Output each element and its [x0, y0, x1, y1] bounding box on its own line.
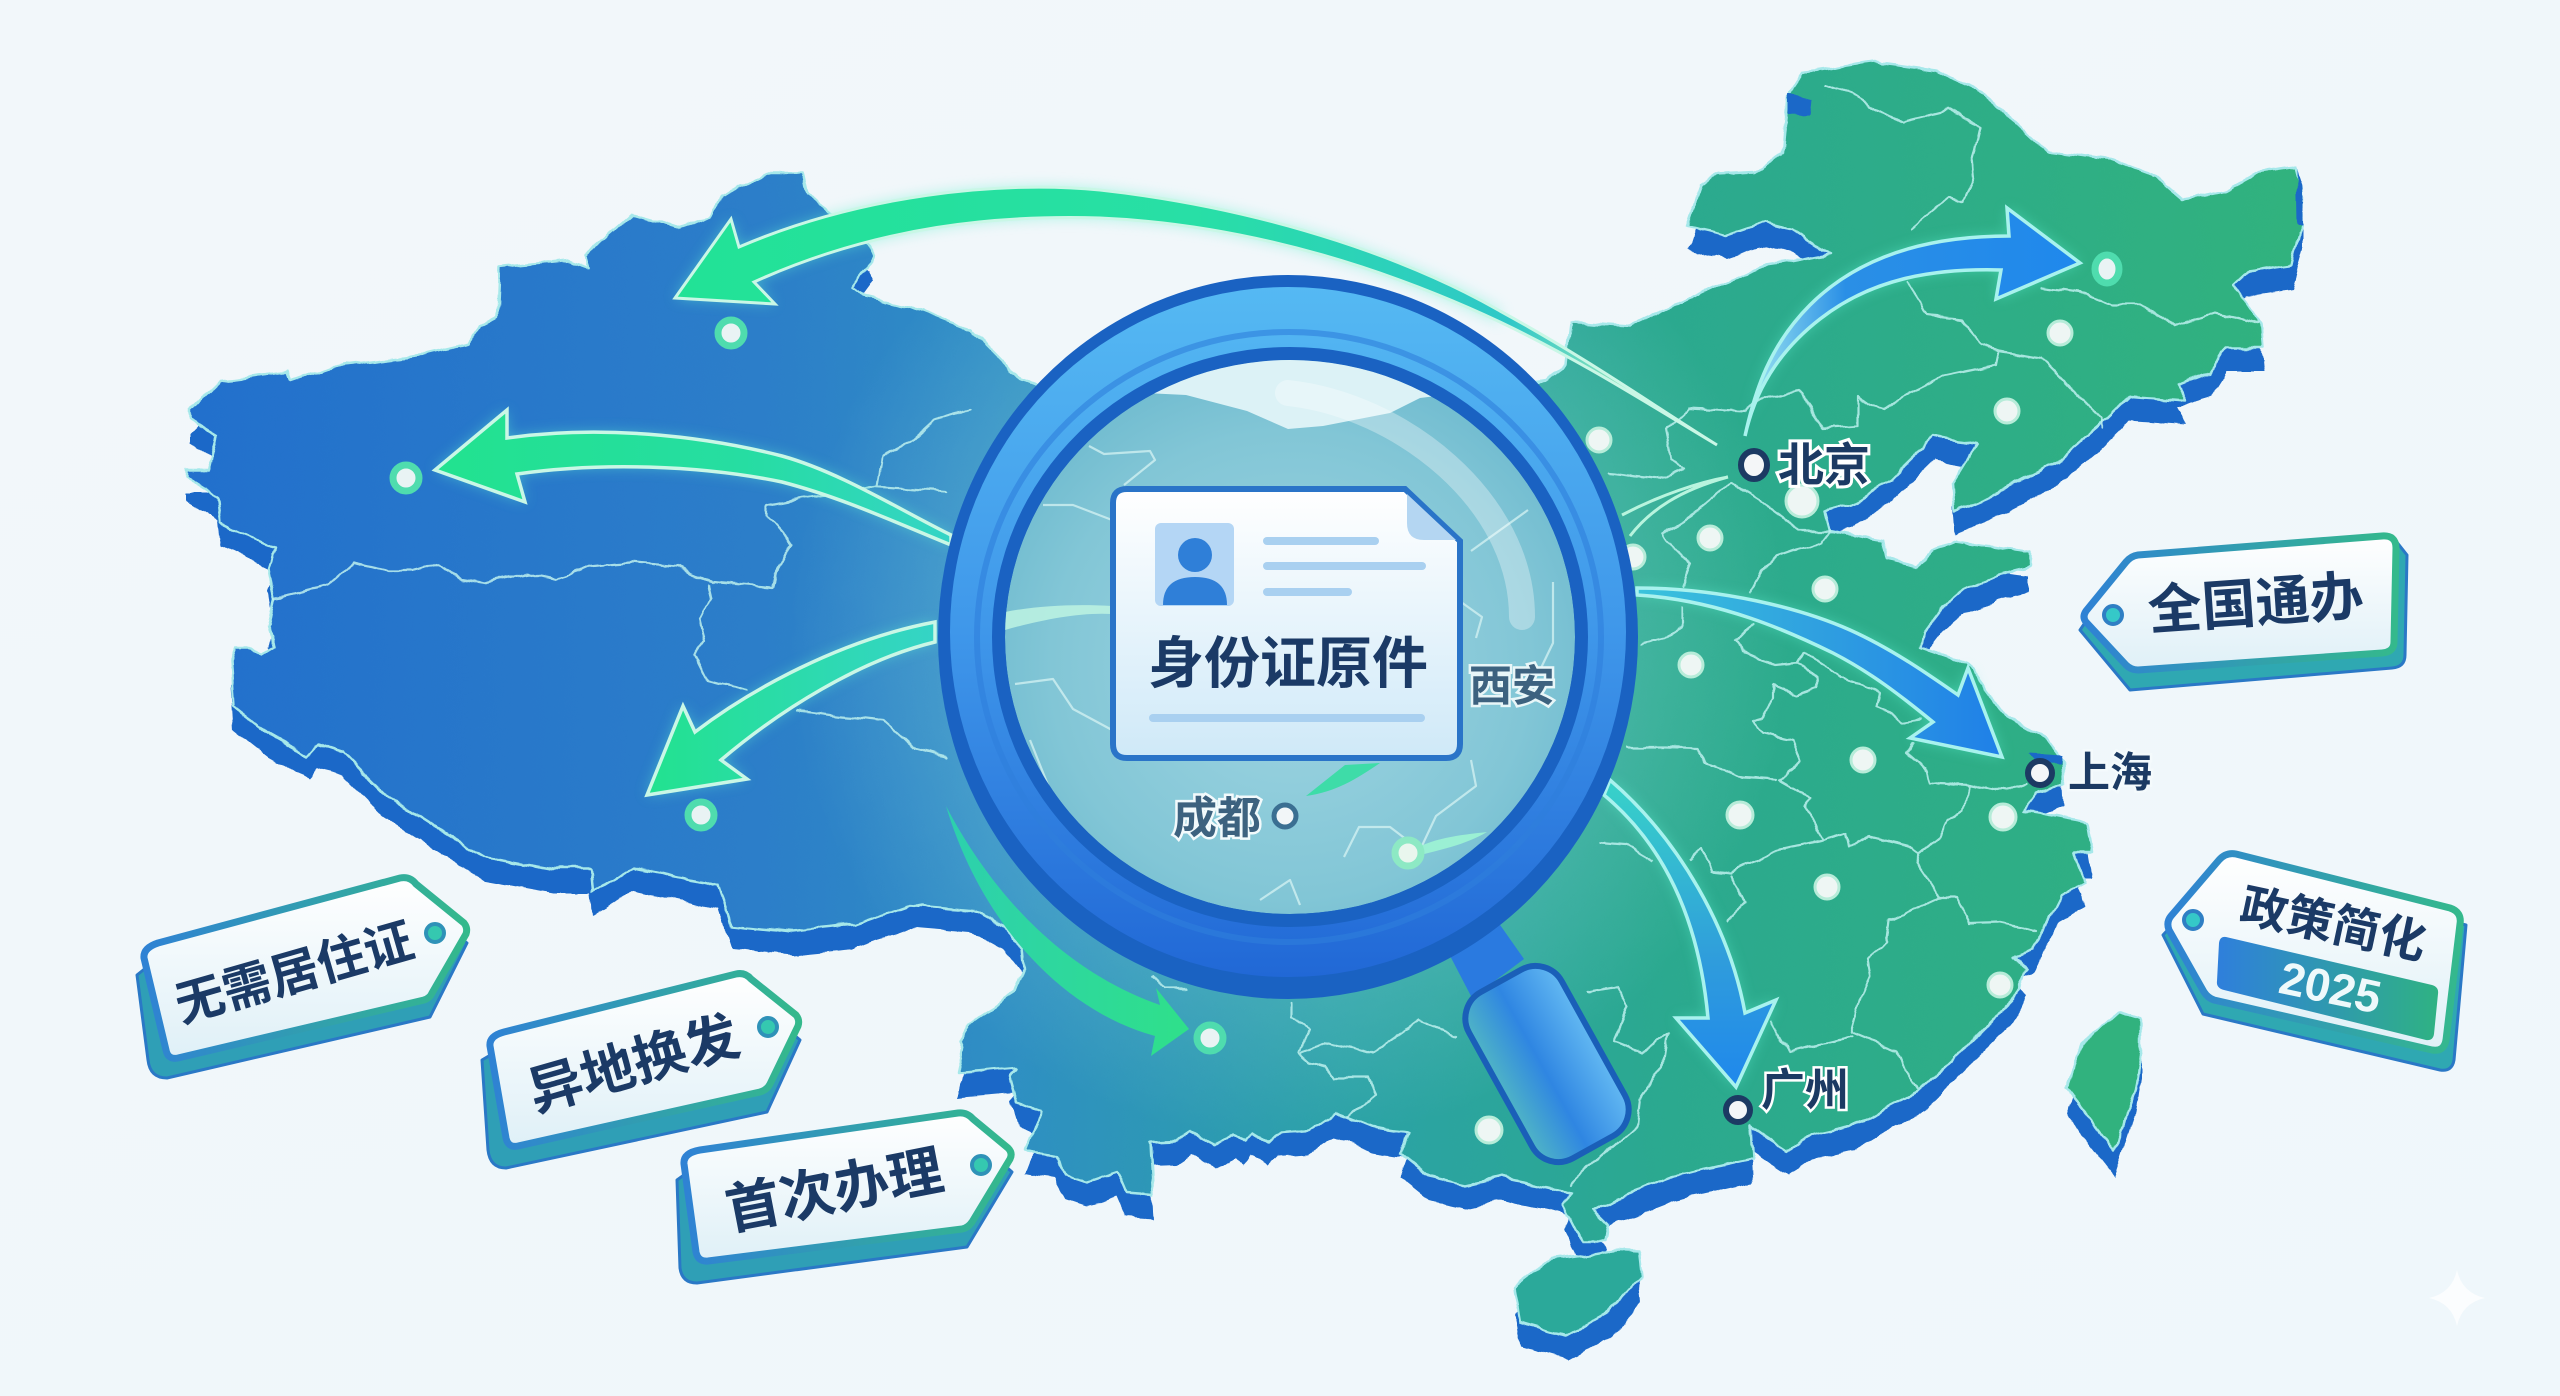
city label: Xi'an: 西安 [1469, 663, 1555, 711]
tag: off-site renewal: 异地换发 [522, 1006, 746, 1123]
white province nodes [1476, 321, 2072, 1143]
tag: nationwide service: 全国通办 [2146, 567, 2366, 642]
year badge: 2025 [2275, 951, 2386, 1023]
island: Hainan [1515, 1250, 1642, 1335]
ID card [1113, 489, 1460, 758]
arrow glow [435, 187, 2080, 1087]
city marker: Guangzhou [1726, 1066, 1849, 1122]
lens halo [844, 323, 1736, 1086]
city marker: Guangzhou: 广州 [1761, 1066, 1849, 1115]
tag: policy simplified 2025 [2163, 854, 2466, 1070]
card fold [1407, 494, 1456, 540]
tag: no residence permit: 无需居住证 [169, 914, 420, 1033]
city dot: Chengdu [1274, 805, 1296, 827]
icon: sparkle watermark [2429, 1270, 2485, 1326]
city label: Chengdu: 成都 [1173, 794, 1261, 843]
city marker: Shanghai: 上海 [2068, 749, 2152, 796]
lens borders [1015, 446, 1553, 905]
tag: no residence permit [137, 878, 467, 1078]
tag: first application [677, 1113, 1012, 1283]
green arrow: to Tibet [647, 622, 935, 795]
island: Taiwan [2066, 1011, 2141, 1151]
mainland [185, 61, 2302, 1240]
card title: 身份证原件 [1148, 632, 1428, 695]
green arrow: to Xinjiang west [435, 410, 951, 545]
lens sky [1154, 360, 1432, 429]
tag: nationwide service [2080, 536, 2407, 690]
tag: first application: 首次办理 [720, 1139, 948, 1242]
blue arrow: to Shanghai [1637, 588, 2002, 757]
handle grip [1455, 955, 1639, 1173]
outer ring [938, 275, 1638, 999]
portrait [1155, 523, 1234, 606]
lens highlight [1288, 393, 1522, 617]
city marker: Beijing: 北京 [1778, 439, 1870, 491]
lens arrow traces [1005, 605, 1112, 630]
card body [1113, 489, 1460, 758]
lens node [1395, 840, 1421, 866]
magnifying glass [938, 275, 1639, 1173]
city marker: Shanghai [2028, 749, 2152, 796]
green arrow: to Xinjiang north [675, 187, 1717, 445]
year badge [2217, 937, 2438, 1040]
info lines [1153, 541, 1422, 718]
map of China [185, 61, 2303, 1361]
lens [1005, 360, 1575, 914]
green arrow: to southwest [946, 806, 1189, 1056]
tag: off-site renewal [482, 974, 800, 1168]
blue coastal patches [1787, 94, 2303, 764]
blue arrow: to Heilongjiang [1745, 208, 2080, 436]
handle neck [1446, 922, 1524, 998]
green-ringed destination nodes [393, 255, 2119, 1051]
tag: policy simplified 2025: 政策简化 [2236, 878, 2431, 969]
blue arrow: to Guangzhou [1604, 780, 1776, 1087]
province borders [275, 86, 2259, 1185]
city nodes [393, 255, 2119, 1143]
faint arrow traces to Beijing [1622, 477, 1728, 536]
map depth edge [185, 85, 2302, 1361]
